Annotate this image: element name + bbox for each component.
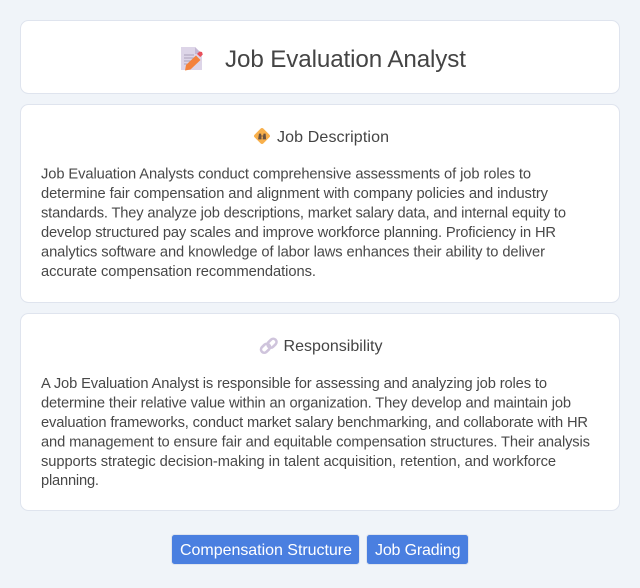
- tag: job grading: [366, 534, 468, 564]
- tag: compensation structure: Compensation Structure: [180, 542, 352, 559]
- tag: compensation structure: [172, 534, 360, 564]
- text block: job description: accurate compensation recommendations.: [41, 264, 316, 280]
- heading: responsibility: Responsibility: [284, 338, 382, 355]
- icon: document with pencil: [181, 47, 203, 70]
- icon: chain link: [260, 337, 278, 354]
- text block: job description: standards. They analyze job descriptions, market salary data, and internal equity to: [41, 206, 566, 222]
- text block: responsibility: A Job Evaluation Analyst is responsible for assessing and analyzing job roles to: [41, 376, 547, 392]
- text block: responsibility: and management to ensure fair and equitable compensation structures. Their analysis: [41, 434, 590, 450]
- tag: job grading: Job Grading: [375, 542, 460, 559]
- text block: job description: develop structured pay scales and improve workforce planning. Proficiency in HR: [41, 225, 556, 241]
- icon: diamond sign: [253, 127, 271, 145]
- text block: job description: Job Evaluation Analysts conduct comprehensive assessments of job roles to: [41, 166, 531, 182]
- text block: job description: analytics software and knowledge of labor laws enhances their ability to deliver: [41, 244, 545, 260]
- text block: responsibility: evaluation frameworks, conduct market salary benchmarking, and collaborate with HR: [41, 415, 588, 431]
- panel: job description: [20, 104, 620, 302]
- text block: job description: [41, 166, 566, 280]
- panel: responsibility: [20, 314, 620, 510]
- panel: title card: [20, 20, 620, 94]
- text block: job description: determine fair compensation and alignment with company policies and industry: [41, 186, 549, 202]
- text block: responsibility: determine their relative value within an organization. They develop and maintain job: [41, 396, 571, 412]
- text block: responsibility: [41, 376, 590, 489]
- text block: responsibility: supports strategic decision-making in talent acquisition, retention, and workforce: [41, 454, 556, 470]
- text block: responsibility: planning.: [41, 473, 99, 489]
- title: Job Evaluation Analyst: [225, 46, 466, 73]
- heading: job description: Job Description: [277, 129, 389, 146]
